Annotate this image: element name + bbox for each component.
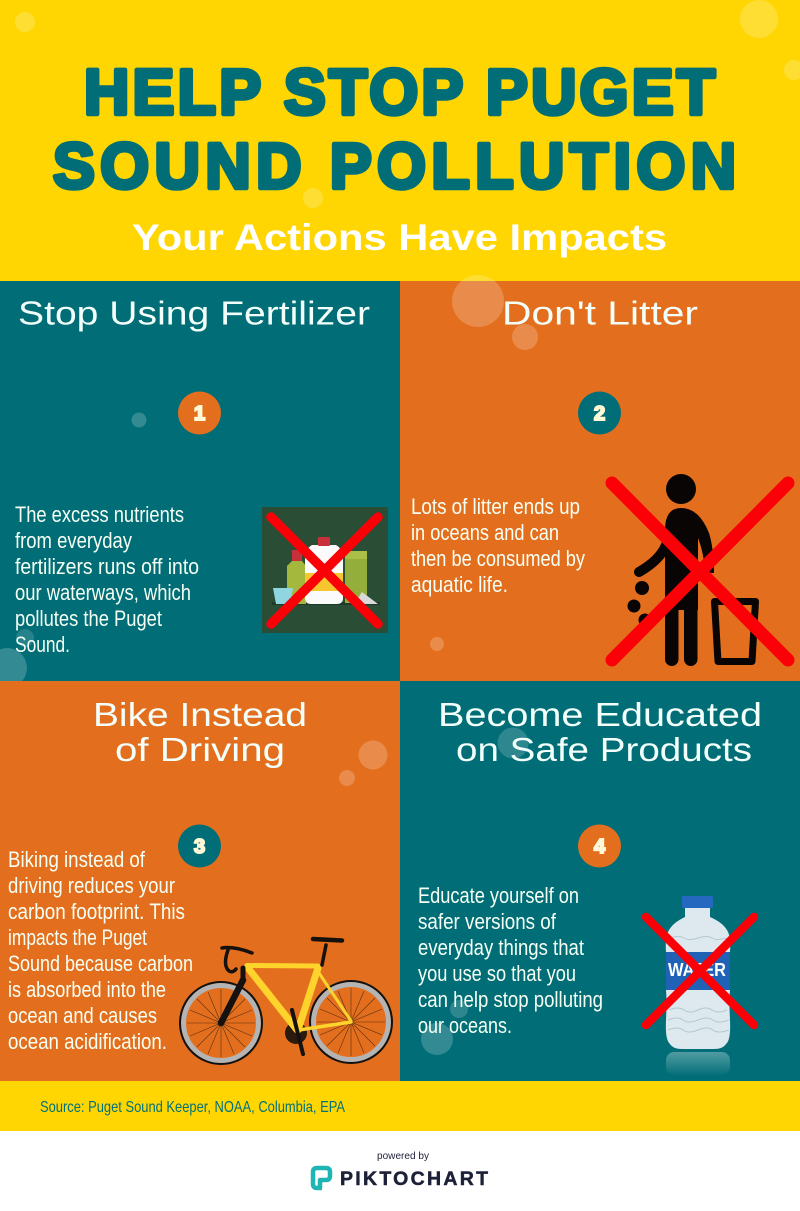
body text 1: pollutes the Puget (15, 606, 162, 631)
body text 4: you use so that you (418, 961, 576, 986)
icon: water bottle crossed out (646, 896, 754, 1075)
body text 1: from everyday (15, 528, 132, 553)
icon: person littering crossed out (612, 474, 788, 666)
body text 3: carbon footprint. This (8, 899, 185, 924)
icon: piktochart logo (313, 1168, 330, 1188)
body text 3: is absorbed into the (8, 977, 166, 1002)
red cross 4 (646, 917, 754, 1025)
wordmark: PIKTOCHART (340, 1168, 488, 1190)
body text 2: then be consumed by (411, 546, 585, 571)
footer: piktochart branding (0, 1131, 800, 1211)
body text 1: Sound. (15, 632, 70, 657)
panel 3: bike instead of driving (0, 681, 400, 1081)
body text 2: Lots of litter ends up (411, 494, 580, 519)
body text 2: aquatic life. (411, 572, 508, 597)
panel 4: become educated on safe products (400, 681, 800, 1081)
body text 4: our oceans. (418, 1013, 512, 1038)
body text 3: driving reduces your (8, 873, 175, 898)
body text 3: Biking instead of (8, 847, 146, 872)
number badge 4: 4 (594, 836, 606, 858)
number badge 3: 3 (194, 836, 205, 858)
icon: yellow road bike (180, 939, 392, 1064)
heading 3: of Driving (115, 731, 285, 768)
header panel (0, 0, 800, 281)
red cross 1 (271, 517, 378, 624)
body text 1 (15, 502, 199, 657)
panel 1: stop using fertilizer (0, 281, 400, 688)
panel 2: don't litter (400, 275, 800, 681)
body text 4: can help stop polluting (418, 987, 603, 1012)
icon: water bottle crossed out: WATER (668, 960, 726, 980)
heading 4 (438, 696, 762, 768)
body text 3: Sound because carbon (8, 951, 193, 976)
source text: Source: Puget Sound Keeper, NOAA, Columbia, EPA (40, 1099, 345, 1116)
body text 4: safer versions of (418, 909, 557, 934)
body text 1: fertilizers runs off into (15, 554, 199, 579)
source bar (0, 1081, 800, 1131)
heading 2: Don't Litter (502, 294, 698, 332)
icon: fertilizer bottles crossed out (262, 507, 388, 633)
body text 3: ocean acidification. (8, 1029, 167, 1054)
body text 4 (418, 883, 603, 1038)
heading 3 (93, 696, 307, 768)
body text 1: The excess nutrients (15, 502, 184, 527)
heading 4: on Safe Products (456, 731, 752, 768)
number badge 2 (578, 392, 621, 434)
number badge 3 (178, 824, 221, 868)
title (53, 57, 736, 202)
red cross 2 (612, 483, 788, 660)
number badge 4 (578, 824, 621, 868)
body text 2 (411, 494, 585, 597)
number badge 1: 1 (194, 403, 205, 425)
heading 1: Stop Using Fertilizer (18, 294, 370, 332)
body text 3: impacts the Puget (8, 925, 147, 950)
body text 1: our waterways, which (15, 580, 191, 605)
title: SOUND POLLUTION (53, 131, 736, 202)
heading 4: Become Educated (438, 696, 762, 733)
powered by: powered by (377, 1151, 429, 1162)
heading 3: Bike Instead (93, 696, 307, 733)
body text 4: everyday things that (418, 935, 584, 960)
body text 3: ocean and causes (8, 1003, 157, 1028)
number badge 1 (178, 392, 221, 434)
title: HELP STOP PUGET (84, 57, 715, 128)
number badge 2: 2 (594, 403, 605, 425)
body text 2: in oceans and can (411, 520, 559, 545)
body text 3 (8, 847, 193, 1054)
subtitle: Your Actions Have Impacts (132, 217, 667, 258)
body text 4: Educate yourself on (418, 883, 579, 908)
